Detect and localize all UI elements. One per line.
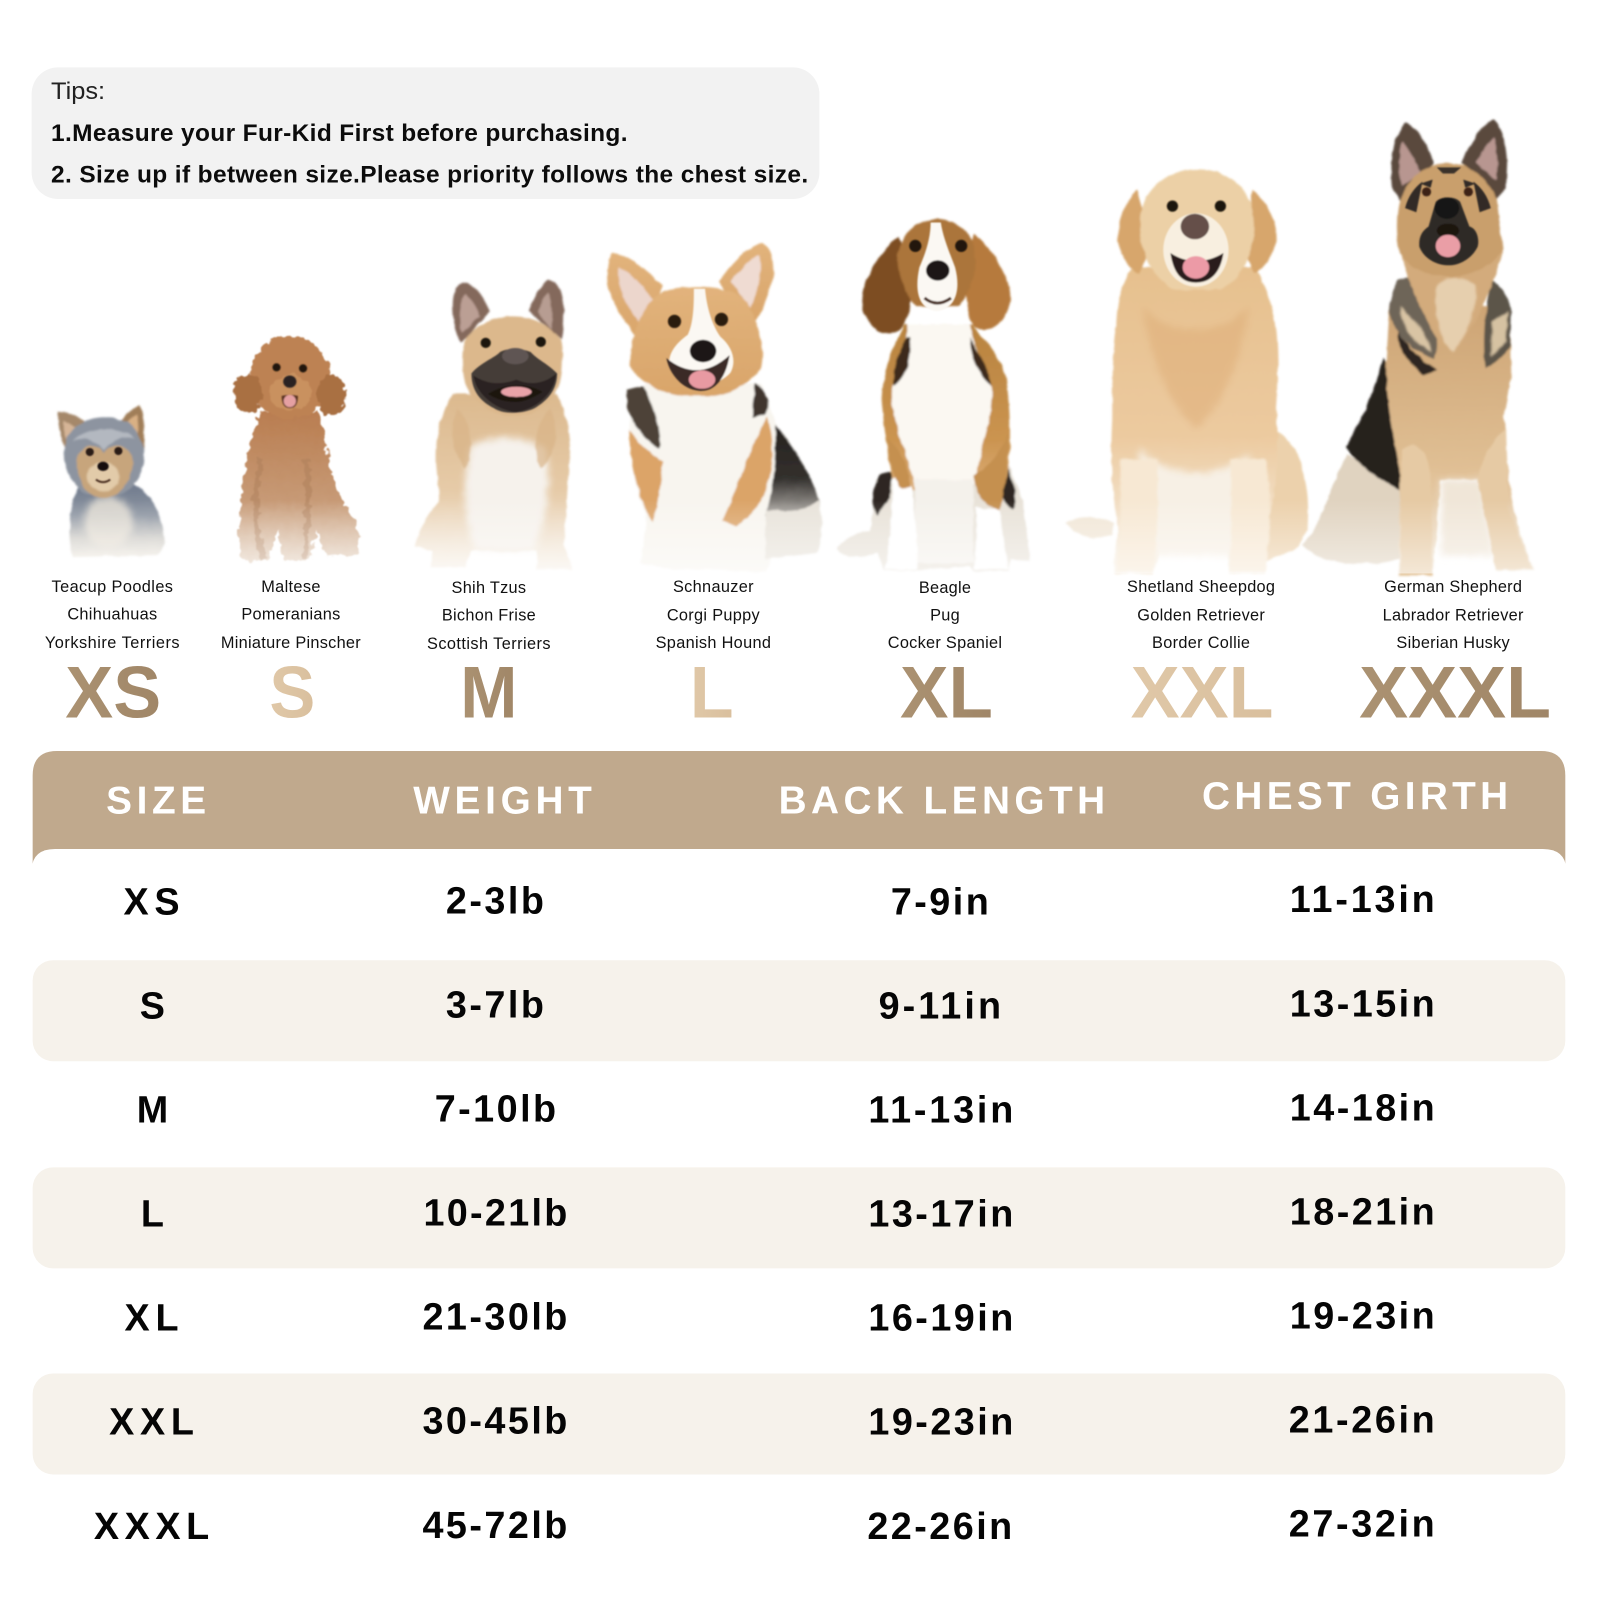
row XXXL: XXXL xyxy=(94,1505,209,1547)
breeds: XS: Yorkshire Terriers xyxy=(45,634,180,652)
row XXL: 21-26in xyxy=(1289,1399,1435,1441)
breeds: M: Scottish Terriers xyxy=(427,635,551,653)
row L xyxy=(33,1167,1565,1268)
breeds: L: Spanish Hound xyxy=(656,634,771,652)
row XS: XS xyxy=(123,880,180,922)
dog illustrations row xyxy=(41,119,1551,576)
breeds: XS: Teacup Poodles xyxy=(52,578,173,596)
size letter S: S xyxy=(269,650,315,733)
row XL xyxy=(124,1295,1435,1339)
header: back length: BACK LENGTH xyxy=(779,779,1105,822)
row XL: XL xyxy=(124,1297,179,1339)
row XXL xyxy=(33,1373,1565,1474)
breeds: XXXL xyxy=(1383,578,1524,652)
breeds: S: Miniature Pinscher xyxy=(221,634,361,652)
row M: 14-18in xyxy=(1290,1086,1435,1128)
breeds: XXXL: German Shepherd xyxy=(1384,578,1522,596)
header: size: SIZE xyxy=(106,779,206,822)
size letters xyxy=(65,650,1551,733)
row XL: 21-30lb xyxy=(422,1296,567,1338)
row S: 3-7lb xyxy=(446,983,544,1025)
row XXL: 30-45lb xyxy=(422,1400,567,1442)
row S xyxy=(33,960,1565,1061)
breeds: S: Pomeranians xyxy=(241,605,340,623)
row XXL: XXL xyxy=(109,1401,194,1443)
size letter M: M xyxy=(460,650,517,733)
breeds: L xyxy=(656,578,771,652)
tip one: 1.Measure your Fur-Kid First before purchasing. xyxy=(51,120,628,147)
breeds: XXL: Golden Retriever xyxy=(1137,606,1265,624)
icon: german shepherd XXXL xyxy=(1302,119,1535,576)
table rows xyxy=(33,878,1565,1547)
row XXXL: 22-26in xyxy=(867,1505,1012,1547)
breeds: XL: Cocker Spaniel xyxy=(888,634,1002,652)
row S: 9-11in xyxy=(879,984,1001,1026)
size letter L: L xyxy=(690,650,734,733)
breeds: M: Shih Tzus xyxy=(452,579,526,597)
row L: 18-21in xyxy=(1290,1190,1435,1232)
breeds: XS: Chihuahuas xyxy=(67,605,157,623)
breeds: XL: Beagle xyxy=(919,579,971,597)
breeds: XL: Pug xyxy=(930,606,960,624)
size letter XXXL: XXXL xyxy=(1359,650,1551,733)
row S: S xyxy=(140,984,165,1026)
row M: 11-13in xyxy=(868,1088,1013,1130)
row XXL: 19-23in xyxy=(868,1401,1013,1443)
row XS: 7-9in xyxy=(891,880,989,922)
icon: yorkshire terrier XS xyxy=(58,405,164,557)
tips heading: Tips: xyxy=(51,78,105,105)
row L: 10-21lb xyxy=(423,1192,567,1234)
breeds: XXL xyxy=(1127,578,1275,652)
row L: L xyxy=(141,1193,164,1235)
row M: 7-10lb xyxy=(435,1087,556,1129)
icon: french bulldog M xyxy=(415,280,573,569)
breed labels xyxy=(45,578,1524,653)
panel: tips xyxy=(32,67,819,199)
row XXXL: 27-32in xyxy=(1289,1503,1435,1545)
row XL: 19-23in xyxy=(1290,1295,1435,1337)
breeds: XL xyxy=(888,579,1002,652)
icon: corgi L xyxy=(608,243,821,571)
tip two: 2. Size up if between size.Please priority follows the chest size. xyxy=(51,162,808,189)
row L: 13-17in xyxy=(868,1193,1013,1235)
breeds: XXL: Border Collie xyxy=(1152,634,1250,652)
row XS xyxy=(123,878,1435,922)
row XXXL xyxy=(94,1503,1435,1547)
row S: 13-15in xyxy=(1290,982,1435,1024)
header: weight: WEIGHT xyxy=(413,779,592,822)
breeds: L: Corgi Puppy xyxy=(667,606,761,624)
icon: beagle XL xyxy=(838,219,1030,571)
row M: M xyxy=(137,1088,168,1130)
row M xyxy=(137,1086,1435,1130)
row XS: 2-3lb xyxy=(446,879,544,921)
breeds: M xyxy=(427,579,551,653)
breeds: XXXL: Labrador Retriever xyxy=(1383,606,1524,624)
row XL: 16-19in xyxy=(868,1297,1013,1339)
size letter XL: XL xyxy=(900,650,993,733)
table header xyxy=(32,751,1566,878)
breeds: S: Maltese xyxy=(261,578,320,596)
row XS: 11-13in xyxy=(1290,878,1435,920)
breeds: M: Bichon Frise xyxy=(442,606,536,624)
breeds: XXL: Shetland Sheepdog xyxy=(1127,578,1275,596)
size letter XXL: XXL xyxy=(1131,650,1273,733)
row XXXL: 45-72lb xyxy=(422,1504,567,1546)
breeds: XXXL: Siberian Husky xyxy=(1396,634,1511,652)
header: chest girth: CHEST GIRTH xyxy=(1202,775,1508,818)
icon: toy poodle S xyxy=(234,337,359,560)
breeds: XS xyxy=(45,578,180,652)
icon: golden retriever XXL xyxy=(1065,169,1308,573)
breeds: L: Schnauzer xyxy=(673,578,754,596)
breeds: S xyxy=(221,578,361,652)
fading overlay xyxy=(41,500,1551,573)
size letter XS: XS xyxy=(65,650,161,733)
